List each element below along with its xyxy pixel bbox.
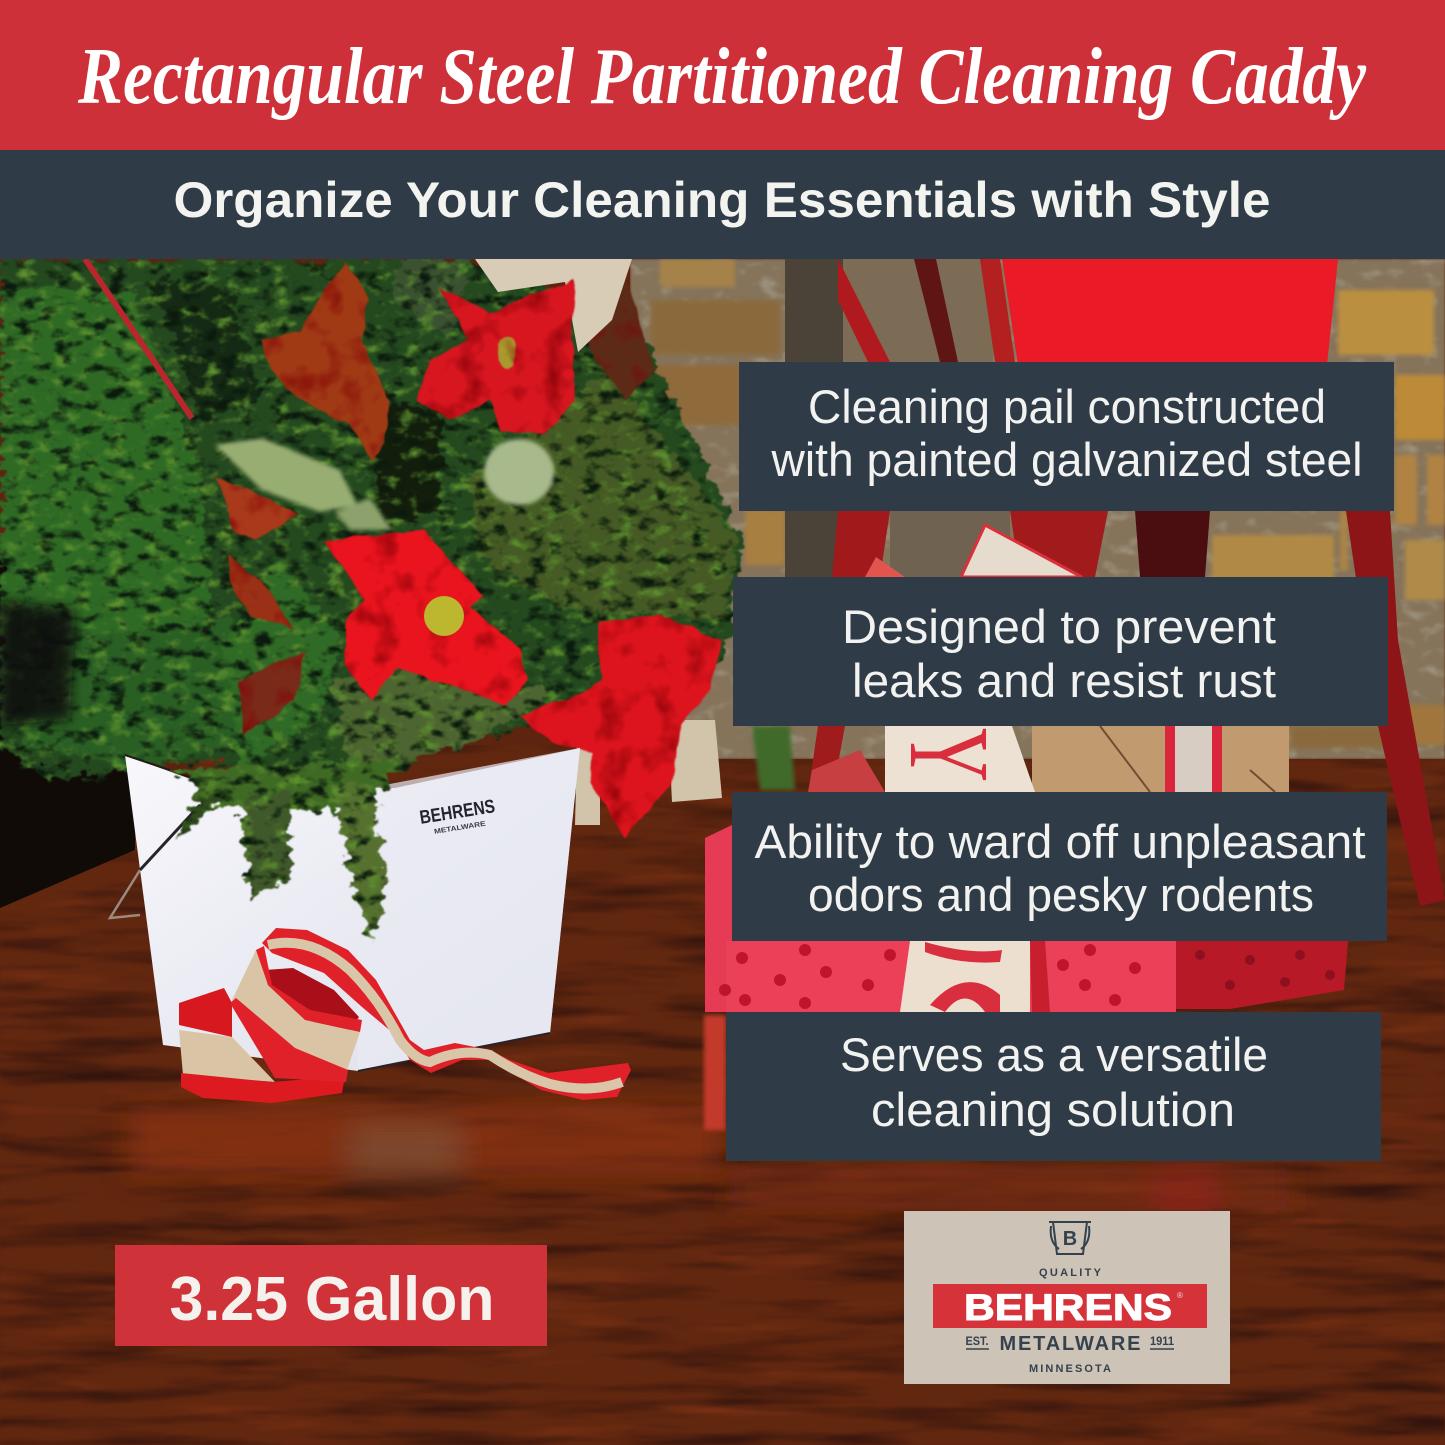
brick wall — [630, 259, 1445, 759]
greenery — [0, 259, 742, 785]
logo: Behrens Metalware — [904, 1211, 1230, 1384]
panel: galvanized steel feature: with painted galvanized steel — [771, 433, 1362, 486]
panel: versatile solution feature — [726, 1012, 1381, 1161]
shadow gaps in greenery — [0, 600, 75, 725]
pale green bracts — [215, 438, 554, 530]
capacity badge: 3.25 Gallon — [170, 1265, 494, 1334]
wood floor — [0, 745, 1445, 1445]
panel: galvanized steel feature — [739, 362, 1394, 511]
gifts: Y — [886, 728, 1014, 782]
red chair and bucket — [810, 259, 1445, 906]
panel: odors and rodents feature: Ability to ward off unpleasant — [754, 815, 1366, 868]
hanging branches — [175, 760, 410, 945]
icon: bucket with B — [1049, 1222, 1091, 1254]
panel: leak and rust feature: leaks and resist rust — [852, 654, 1276, 707]
panel: leak and rust feature — [733, 577, 1388, 726]
logo: Behrens Metalware: MINNESOTA — [1029, 1363, 1111, 1375]
logo: Behrens Metalware: BEHRENS — [964, 1287, 1172, 1328]
panel: odors and rodents feature: odors and pesky rodents — [808, 868, 1314, 921]
red stem — [85, 259, 192, 418]
poinsettia: center — [325, 530, 528, 706]
caddy brand mark — [418, 796, 498, 838]
dark left corner — [0, 560, 135, 908]
panel: versatile solution feature: Serves as a versatile — [840, 1028, 1268, 1081]
caddy brand mark: BEHRENS — [418, 796, 497, 829]
logo: Behrens Metalware: 1911 — [1150, 1334, 1174, 1348]
poinsettia: top — [416, 280, 575, 435]
logo: Behrens Metalware: EST. — [966, 1334, 988, 1348]
birch trunk — [575, 700, 722, 825]
logo: Behrens Metalware: METALWARE — [1000, 1333, 1140, 1355]
poinsettia: lower right — [520, 615, 722, 836]
panel: odors and rodents feature — [732, 792, 1387, 941]
birch bark — [475, 259, 632, 352]
title banner — [0, 0, 1445, 150]
caddy brand mark: METALWARE — [434, 821, 487, 836]
ribbon — [179, 928, 631, 1103]
logo: Behrens Metalware: ® — [1177, 1291, 1183, 1300]
panel: versatile solution feature: cleaning solution — [871, 1083, 1235, 1136]
panel: leak and rust feature: Designed to prevent — [842, 600, 1276, 653]
copper leaves — [215, 262, 655, 735]
subtitle banner: Organize Your Cleaning Essentials with Style — [174, 172, 1270, 228]
icon: bucket with B: B — [1063, 1228, 1077, 1250]
gifts — [705, 525, 1348, 1012]
subtitle banner — [0, 150, 1445, 259]
logo: Behrens Metalware: QUALITY — [1039, 1267, 1102, 1279]
panel: galvanized steel feature: Cleaning pail constructed — [808, 380, 1326, 433]
capacity badge — [115, 1245, 547, 1346]
caddy — [110, 748, 580, 1071]
